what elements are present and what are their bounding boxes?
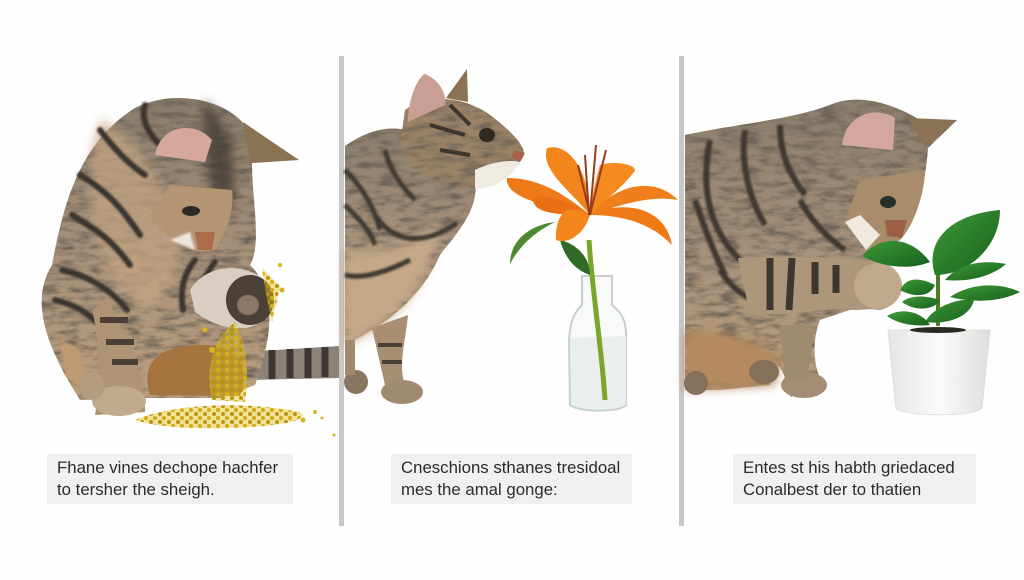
cat head (400, 99, 524, 188)
caption 3: Entes st his habth griedaced (743, 458, 955, 477)
lily stem (589, 240, 605, 400)
pollen (135, 263, 336, 436)
caption 1: to tersher the sheigh. (57, 480, 215, 499)
cat front leg (92, 300, 145, 415)
plant (862, 210, 1020, 333)
cat face (150, 185, 233, 251)
vase (569, 276, 626, 411)
cat legs (344, 315, 423, 404)
cat (344, 69, 525, 404)
caption 2: Cneschions sthanes tresidoal (401, 458, 620, 477)
pot (888, 330, 990, 415)
caption 1: Fhane vines dechope hachfer (57, 458, 278, 477)
lily flower (507, 145, 678, 245)
cat (684, 100, 957, 398)
cat raised paw (190, 268, 272, 328)
caption 3: Conalbest der to thatien (743, 480, 921, 499)
cat face (845, 170, 925, 247)
cat ears (155, 128, 212, 162)
cat body (42, 98, 299, 416)
cat tail (245, 346, 339, 380)
caption 3 (733, 454, 976, 504)
caption 2: mes the amal gonge: (401, 480, 558, 499)
caption 2 (391, 454, 632, 504)
panel 3: cat pawing plant (684, 100, 1020, 415)
panel 2: cat sniffing lily (344, 69, 678, 411)
lily leaves (510, 222, 590, 275)
divider right (679, 56, 684, 526)
cat front leg (738, 257, 899, 315)
panel 1: cat scattering pollen (42, 98, 339, 436)
cat lower paws (684, 325, 827, 398)
caption 1 (47, 454, 293, 504)
divider left (339, 56, 344, 526)
